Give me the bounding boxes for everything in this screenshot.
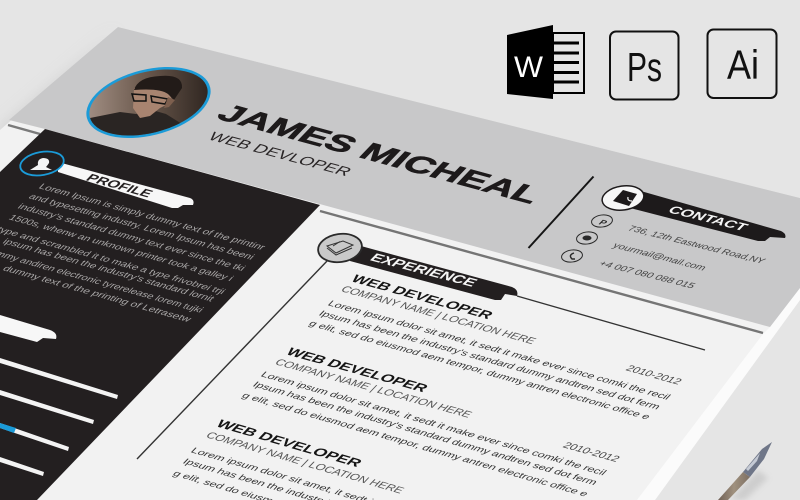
job 1 title: WEB DEVELOPER <box>348 273 496 321</box>
icon: Photoshop <box>610 32 678 100</box>
contact heading: CONTACT <box>665 203 751 233</box>
job 1 description <box>306 299 672 422</box>
skill bar 2 <box>0 390 94 424</box>
icon: Word <box>507 25 584 99</box>
contact row: phone: +4 007 080 088 015 <box>596 259 697 291</box>
profile paragraph: 1500s, whenw an unknown printer took a galley i <box>6 213 235 283</box>
pen <box>718 442 772 500</box>
skill bar 3 <box>0 423 69 451</box>
job 2 company: COMPANY NAME | LOCATION HERE <box>272 358 474 420</box>
profile paragraph: type and scrambled it to make a type frivobrei trji <box>0 225 227 296</box>
header band <box>9 27 800 327</box>
profile section <box>0 148 268 324</box>
icon: Photoshop: Ps <box>627 44 662 90</box>
job 2 description: Ipsum has been the industry's standard dummy andtren sed dot ferm <box>250 380 599 487</box>
icon: Word: W <box>514 51 544 84</box>
job 1 description: Lorem ipsum dolor sit amet, it sedt it make ever since comki the recil <box>325 299 672 402</box>
contact row: email <box>576 231 708 273</box>
skills section <box>0 315 118 476</box>
contact row: phone <box>561 249 697 291</box>
sidebar panel <box>0 129 320 500</box>
icon: contact notebook <box>601 183 645 213</box>
job entry 3 <box>170 418 540 500</box>
header divider <box>528 176 594 248</box>
job 1 date: 2010-2012 <box>623 364 684 387</box>
profile label bar <box>58 162 194 208</box>
icon: Illustrator: Ai <box>727 42 759 88</box>
job 1 description: g elit, sed do eiusmod aem tempor, dummy antren electronic office e <box>306 319 652 422</box>
contact row: address: P <box>597 218 609 227</box>
icon: Illustrator <box>708 30 776 98</box>
experience timeline <box>137 260 328 459</box>
name heading: JAMES MICHEAL <box>210 100 549 209</box>
contact row: address <box>591 214 768 266</box>
experience heading: EXPERIENCE <box>366 251 480 290</box>
profile heading: PROFILE <box>83 172 156 200</box>
skill bar 4 <box>0 457 44 476</box>
skill bar 1 <box>0 358 118 399</box>
experience label bar <box>350 243 517 300</box>
job 3 title: WEB DEVELOPER <box>213 418 365 469</box>
icon: profile person <box>18 148 66 179</box>
job 1 description: Ipsum has been the industry's standard dummy andtren sed dot ferm <box>316 309 662 412</box>
profile paragraph: dummy text of the printing of Letrasetw <box>0 264 194 324</box>
job 2 description: Lorem ipsum dolor sit amet, it sedt it make ever since comki the recil <box>258 370 608 478</box>
job 2 title: WEB DEVELOPER <box>283 346 431 394</box>
experience section header <box>316 231 517 300</box>
job 2 date: 2010-2012 <box>560 441 622 464</box>
job 2 description <box>239 370 608 499</box>
contact section <box>561 183 786 291</box>
profile paragraph <box>0 182 268 324</box>
profile paragraph: ipsum has been the industry's standard lornit <box>0 237 217 304</box>
job 1 company: COMPANY NAME | LOCATION HERE <box>338 285 538 346</box>
job 2 description: g elit, sed do eiusmod aem tempor, dummy antren electronic office e <box>239 391 590 499</box>
profile paragraph: Lorem Ipsum is simply dummy text of the printinr <box>36 182 268 252</box>
profile paragraph: industry's standard dummy text ever since the tki <box>15 202 247 273</box>
contact row: email: yourmail@mail.com <box>610 241 708 273</box>
job entry 1 <box>306 273 684 422</box>
icon: briefcase <box>316 231 364 265</box>
job 3 company: COMPANY NAME | LOCATION HERE <box>203 431 406 496</box>
skills label bar <box>0 315 56 342</box>
profile photo <box>86 67 211 138</box>
job title: WEB DEVLOPER <box>204 130 355 179</box>
contact label bar <box>630 188 786 241</box>
contact row: address: 736, 12th Eastwood Road,NY <box>625 224 768 266</box>
job entry 2 <box>239 346 622 499</box>
profile paragraph: and typesetting industry. Lorem Ipsum has beeni <box>26 192 256 262</box>
